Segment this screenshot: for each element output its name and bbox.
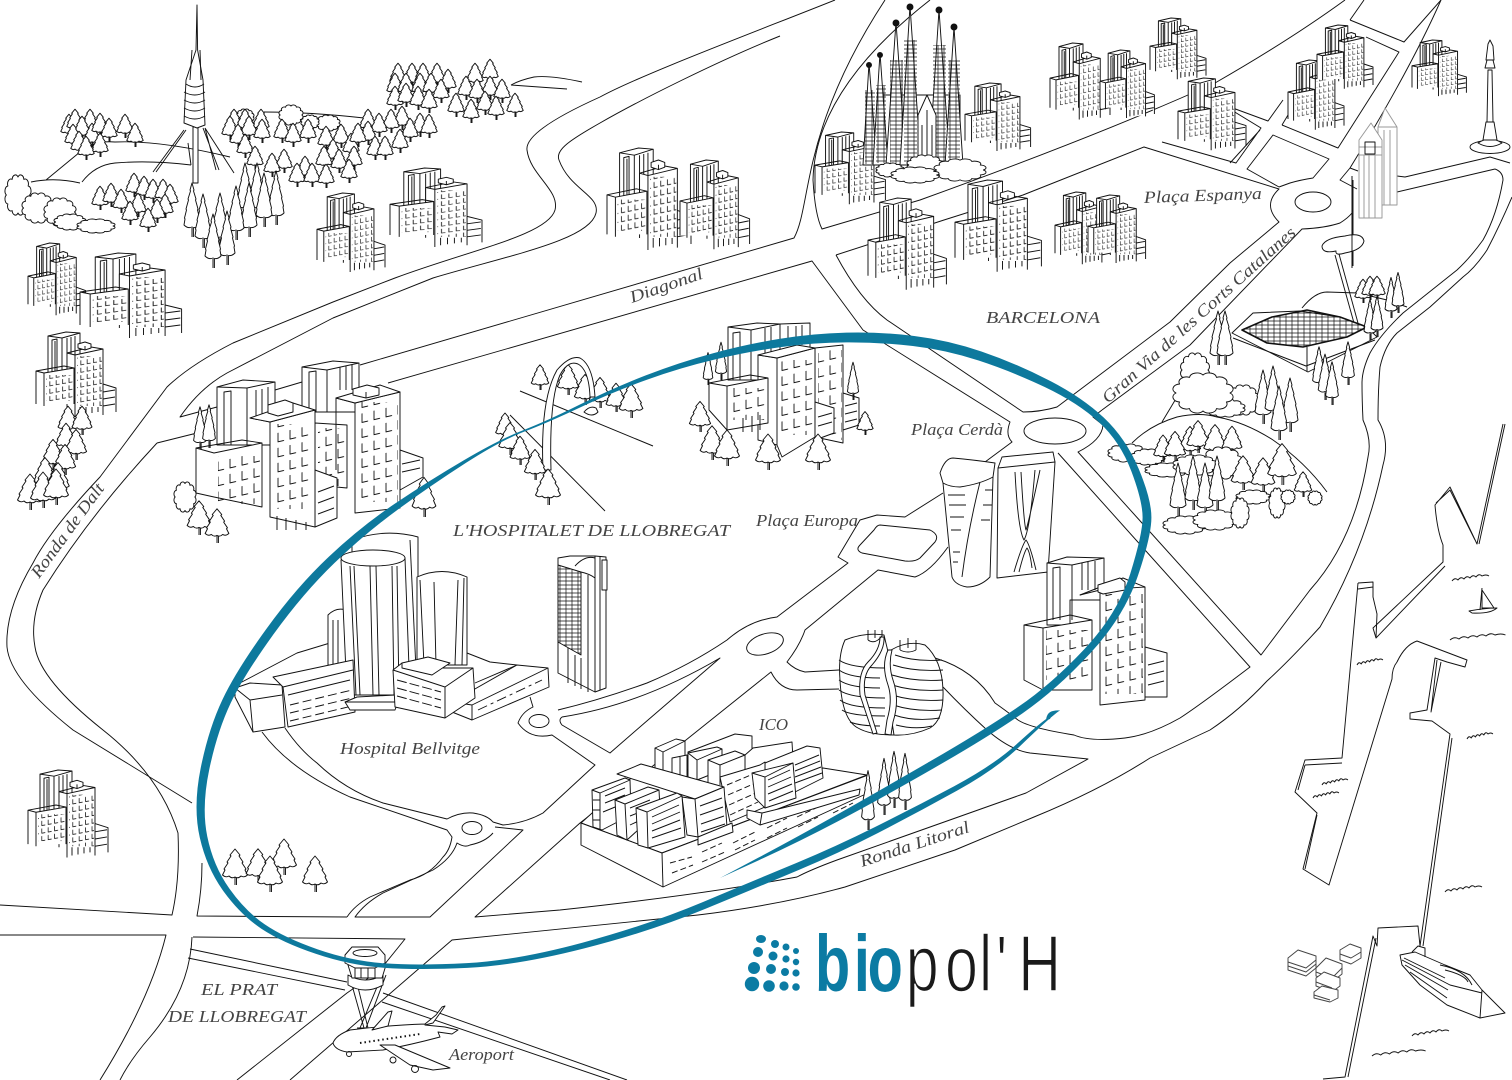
labels: Plaça Espanya — [1142, 184, 1262, 207]
labels: Aeroport — [448, 1045, 515, 1064]
cruise ship — [1400, 946, 1505, 1018]
forest: Collserola conifers — [61, 59, 523, 232]
logo wordmark: bio — [815, 919, 903, 1008]
ICO building — [581, 734, 868, 887]
labels: Diagonal — [626, 264, 705, 307]
labels: Ronda Litoral — [856, 817, 972, 871]
residential cluster near Ronda — [1024, 557, 1167, 705]
large residential cluster L'Hospitalet — [174, 361, 436, 543]
airport control tower — [345, 947, 386, 1028]
labels: DE LLOBREGAT — [167, 1007, 308, 1026]
labels: Ronda de Dalt — [26, 478, 109, 582]
teal swoosh enclosing the biopol'H area — [197, 333, 1151, 969]
labels: Gran Via de les Corts Catalanes — [1098, 223, 1300, 407]
arch sculpture and trees — [496, 358, 653, 511]
left tree groups — [18, 406, 328, 892]
Montjuic telecom tower — [1322, 176, 1364, 323]
Collserola tower — [153, 5, 234, 183]
Collserola hills and lines — [31, 77, 582, 183]
Hospital de Bellvitge — [235, 533, 549, 732]
labels: ICO — [758, 715, 788, 734]
cypress trees by ICO — [862, 751, 911, 830]
Colom column — [1470, 40, 1510, 154]
logo: biopol'H: pol'H — [906, 918, 1061, 1008]
glass tower — [558, 556, 607, 692]
building clusters — [28, 18, 1466, 858]
Plaça Cerdà towers — [940, 452, 1055, 587]
labels — [26, 184, 1300, 1064]
labels: Plaça Cerdà — [910, 420, 1003, 439]
Palau Sant Jordi — [1232, 292, 1407, 372]
labels: L'HOSPITALET DE LLOBREGAT — [452, 521, 732, 540]
airplane — [333, 1006, 458, 1072]
labels: BARCELONA — [986, 308, 1101, 327]
park near Montjuic — [1108, 272, 1404, 534]
container stacks — [1288, 944, 1361, 1002]
Sagrada Familia — [863, 4, 986, 183]
logo mark: dot grid — [745, 935, 800, 992]
egg-shaped twin towers — [839, 630, 943, 735]
cypress grove — [184, 163, 284, 268]
central cluster with trees — [689, 323, 873, 470]
labels: Hospital Bellvitge — [339, 739, 481, 758]
deciduous bushes left — [5, 175, 115, 233]
labels: EL PRAT — [200, 980, 279, 999]
Venetian towers — [1359, 108, 1397, 218]
labels: Plaça Europa — [755, 511, 858, 530]
waves — [1313, 575, 1506, 1056]
sailboat — [1469, 588, 1497, 613]
logo: biopol'H — [745, 918, 1061, 1008]
ports and piers — [1295, 424, 1505, 1079]
